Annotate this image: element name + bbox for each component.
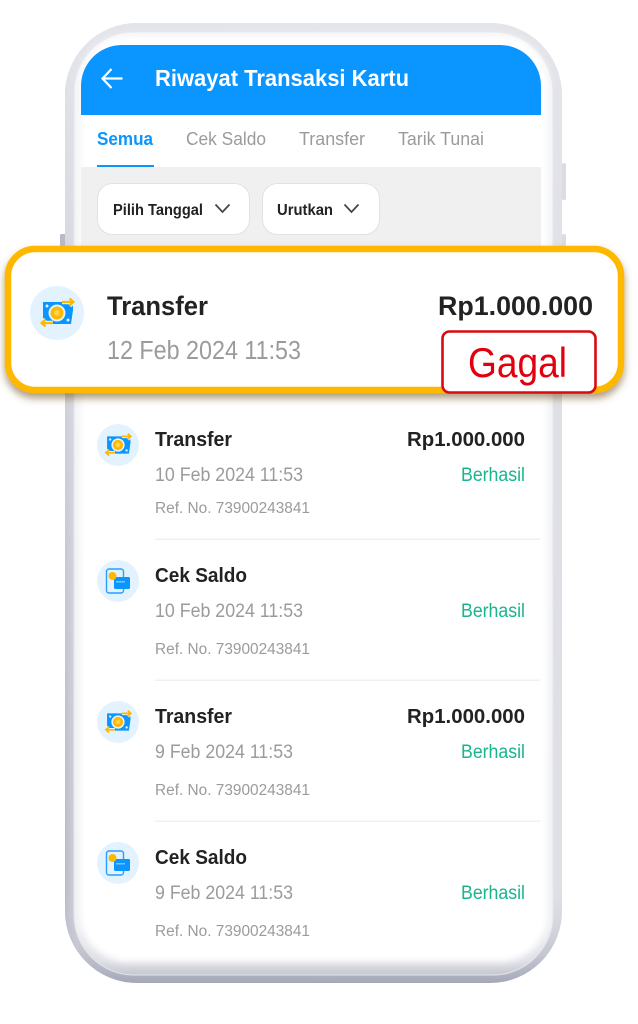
row: Transfer 9 Feb: Transfer [155,705,232,728]
icon: back arrow [102,69,122,88]
row: Cek Saldo 10 Feb: Ref. No. 73900243841 [155,641,310,658]
row: Transfer 9 Feb: Berhasil [461,742,525,763]
row: Cek Saldo 9 Feb: Cek Saldo [155,846,247,869]
tabs: Tarik Tunai [398,128,484,149]
filter: Pilih Tanggal: Pilih Tanggal [113,202,203,219]
row: Transfer 10 Feb: Rp1.000.000 [407,428,525,451]
status: Gagal [442,332,596,392]
tabs: Transfer [299,128,365,149]
row: Cek Saldo 10 Feb: Cek Saldo [155,564,247,587]
card amount: Rp1.000.000 [438,291,593,321]
row: Transfer 9 Feb: Rp1.000.000 [407,705,525,728]
icon: transfer [30,286,84,340]
row: Cek Saldo 9 Feb: Ref. No. 73900243841 [155,923,310,940]
tabs: Semua [97,128,154,149]
header bar [81,45,541,115]
row: Transfer 9 Feb: 9 Feb 2024 11:53 [155,742,293,763]
filter panel [81,167,541,257]
row: Transfer 10 Feb: 10 Feb 2024 11:53 [155,465,303,486]
row: Transfer 10 Feb: Ref. No. 73900243841 [155,500,310,517]
row: Cek Saldo 9 Feb: Berhasil [461,883,525,904]
row: Cek Saldo 9 Feb [97,842,525,940]
filter: Urutkan [262,184,380,234]
row: Cek Saldo 10 Feb [97,560,540,681]
row: Cek Saldo 10 Feb: Berhasil [461,601,525,622]
row: Transfer 9 Feb: Ref. No. 73900243841 [155,782,310,799]
row: Transfer 10 Feb: Transfer [155,428,232,451]
row: Transfer 10 Feb: Berhasil [461,465,525,486]
title: Riwayat Transaksi Kartu [155,65,409,91]
row: Cek Saldo 9 Feb: 9 Feb 2024 11:53 [155,883,293,904]
highlighted transaction card [8,249,621,392]
row: Cek Saldo 10 Feb: 10 Feb 2024 11:53 [155,601,303,622]
card title: Transfer [107,291,208,321]
status: Gagal: Gagal [468,339,567,386]
phone frame [60,23,566,983]
row: Transfer 9 Feb [97,701,540,822]
filter: Urutkan: Urutkan [277,202,333,219]
tabs [97,128,484,168]
row: Transfer 10 Feb [97,424,540,540]
filter: Pilih Tanggal [98,184,250,234]
card date: 12 Feb 2024 11:53 [107,337,301,365]
tabs: Cek Saldo [186,128,266,149]
